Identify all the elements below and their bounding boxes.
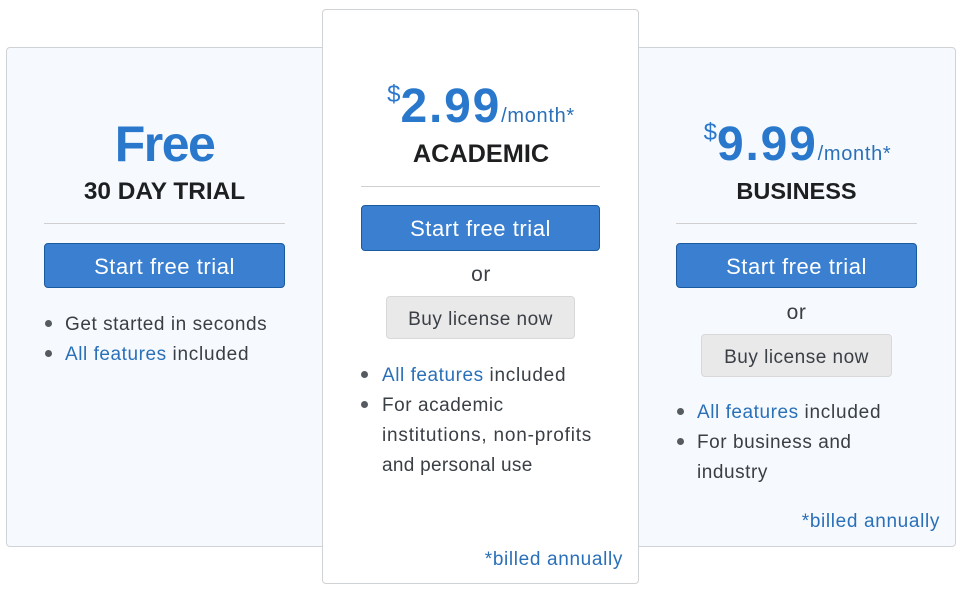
free bullet list: Get started in seconds — [65, 314, 267, 335]
business start trial button — [676, 243, 917, 288]
academic title: ACADEMIC — [413, 140, 549, 168]
business billing note: *billed annually — [802, 511, 940, 532]
academic or: or — [471, 263, 491, 286]
business start trial button: Start free trial — [726, 254, 867, 279]
academic buy license button — [386, 296, 575, 339]
academic start trial button — [361, 205, 600, 251]
free bullet list — [45, 314, 267, 365]
academic bullet list: For academic — [382, 395, 504, 416]
academic start trial button: Start free trial — [410, 216, 551, 241]
academic bullet list: All features included — [382, 365, 566, 386]
free plan title: 30 DAY TRIAL — [84, 178, 245, 205]
panel: business plan — [636, 47, 956, 547]
free start trial button: Start free trial — [94, 254, 235, 279]
academic bullet list — [361, 365, 592, 476]
academic bullet list: and personal use — [382, 455, 533, 476]
business bullet list: All features included — [697, 402, 881, 423]
panel: academic plan — [322, 9, 639, 584]
business bullet list: For business and — [697, 432, 852, 453]
academic buy license button: Buy license now — [408, 309, 553, 330]
business or: or — [787, 301, 806, 324]
free start trial button — [44, 243, 285, 288]
panel: free plan — [6, 47, 326, 547]
academic bullet list: institutions, non-profits — [382, 425, 592, 446]
academic price: $2.99/month* — [387, 80, 575, 133]
business bullet list: industry — [697, 462, 768, 483]
business buy license button — [701, 334, 892, 377]
free bullet list: All features included — [65, 344, 249, 365]
free price heading: Free — [115, 116, 214, 172]
academic billing note: *billed annually — [485, 549, 623, 570]
business title: BUSINESS — [736, 178, 857, 204]
business price: $9.99/month* — [704, 118, 891, 171]
business buy license button: Buy license now — [724, 347, 869, 368]
business bullet list — [677, 402, 881, 483]
